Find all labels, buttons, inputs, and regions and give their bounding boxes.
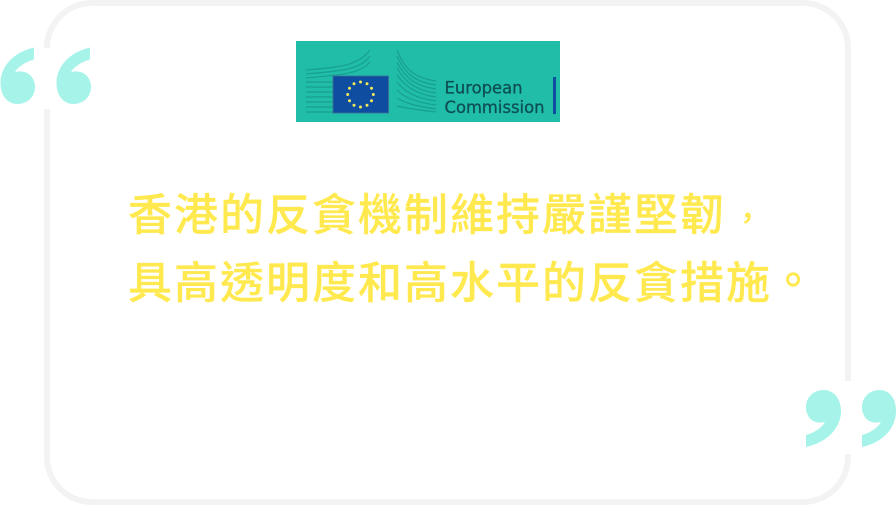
- quote text: 。: [771, 257, 817, 306]
- icon: opening quotation marks: [0, 48, 91, 104]
- logo wordmark: Commission: [444, 98, 544, 118]
- logo blue bar: [553, 77, 556, 114]
- quote text: ，: [732, 203, 762, 236]
- quote text: [128, 191, 817, 308]
- logo flag stars: [346, 80, 375, 108]
- icon: closing quotation marks: [806, 390, 896, 447]
- logo building lines: [306, 50, 436, 112]
- quote text: 香港的反貪機制維持嚴謹堅韌: [128, 191, 726, 240]
- logo: European Commission: [296, 41, 560, 122]
- quote text: 具高透明度和高水平的反貪措施: [128, 259, 772, 308]
- logo wordmark: [444, 78, 544, 118]
- logo wordmark: European: [444, 78, 522, 98]
- logo EU flag: [333, 76, 388, 113]
